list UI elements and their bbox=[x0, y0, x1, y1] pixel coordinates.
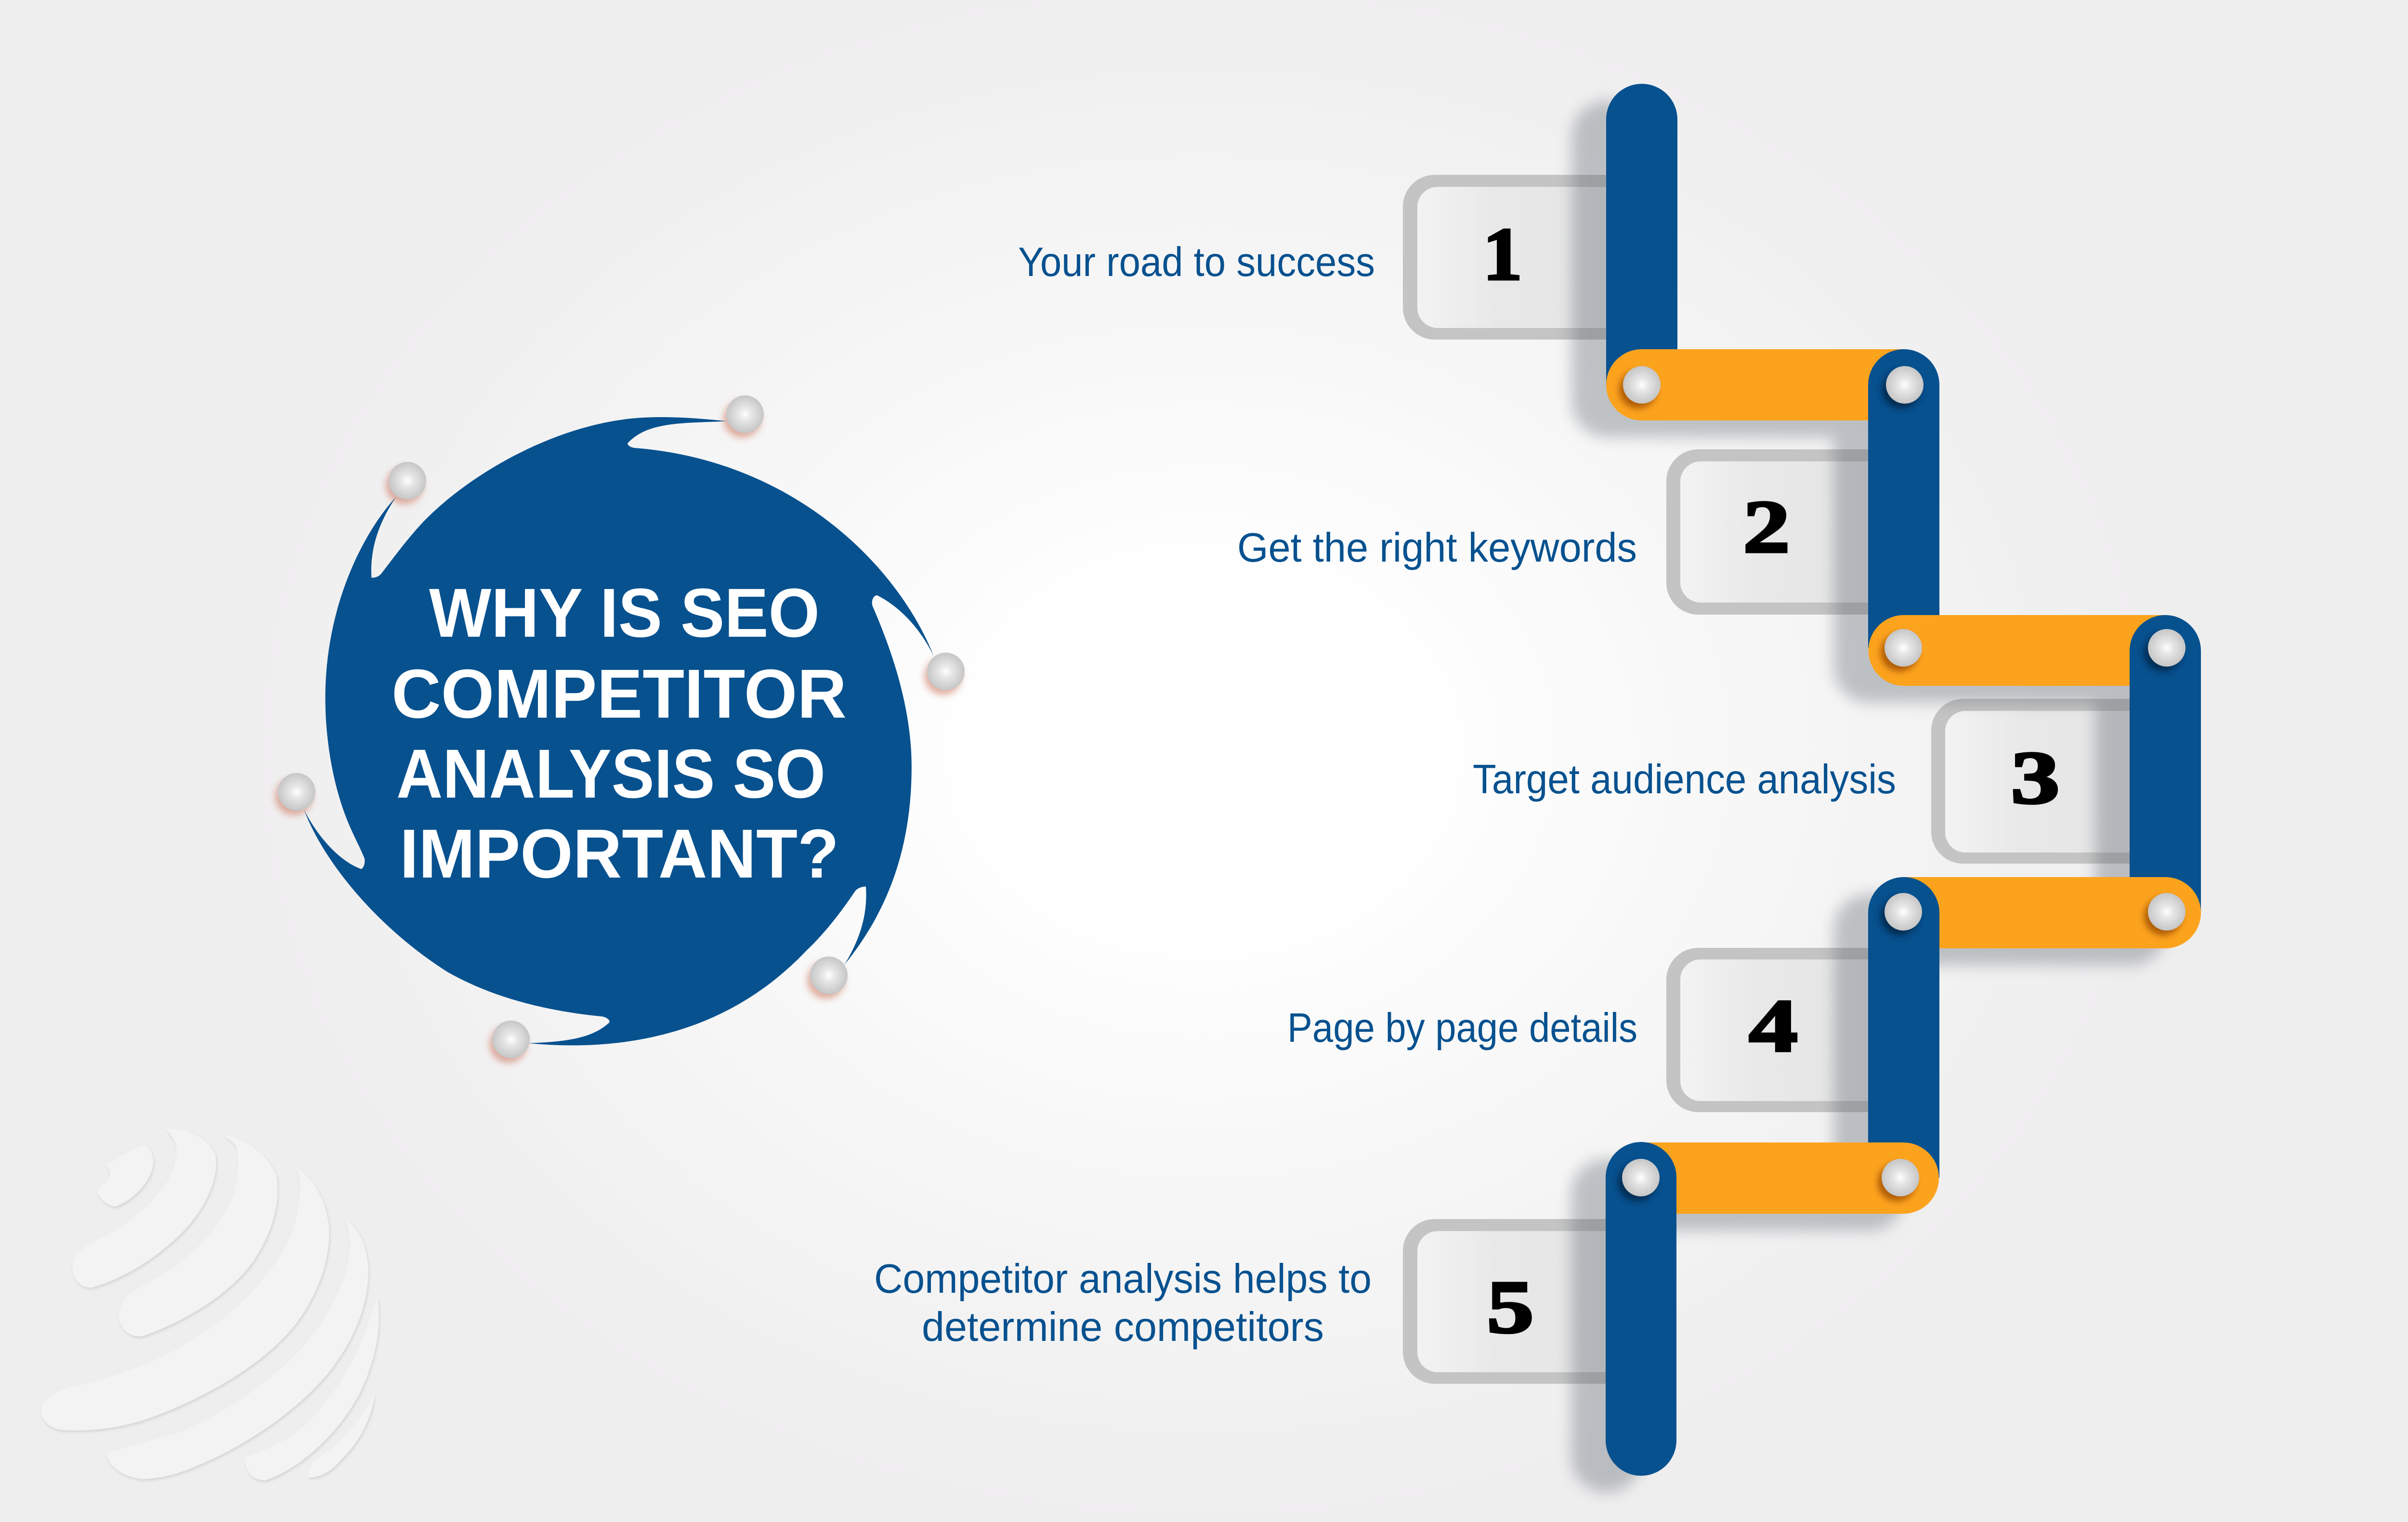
blue bar 4 bbox=[1868, 877, 1939, 1178]
step 4 label: Page by page details bbox=[1287, 1005, 1637, 1051]
pearl shadows on orange bbox=[1619, 371, 2182, 1201]
panel: step 2 number box bbox=[1666, 449, 1911, 615]
ribbon pearls bbox=[1622, 366, 2186, 1196]
panel: step 3 number box bbox=[1931, 699, 2176, 864]
panel: step 5 number box bbox=[1403, 1219, 1649, 1384]
title bbox=[392, 574, 847, 892]
orange bar 4 bbox=[1641, 1142, 1939, 1214]
step 1 label: Your road to success bbox=[1018, 239, 1375, 285]
panel: step 4 number box bbox=[1666, 948, 1911, 1112]
badge: blue swirl circle bbox=[304, 417, 934, 1045]
number 3: 3 bbox=[2011, 736, 2060, 819]
panel: step 1 number box bbox=[1403, 175, 1649, 340]
step 5 label bbox=[874, 1256, 1372, 1350]
title: ANALYSIS SO bbox=[396, 735, 825, 813]
step 5 label: determine competitors bbox=[922, 1304, 1324, 1350]
title: COMPETITOR bbox=[392, 655, 847, 733]
blue bar 5 bbox=[1606, 1142, 1676, 1476]
blue bar 3 bbox=[2130, 615, 2201, 912]
number 1: 1 bbox=[1483, 212, 1522, 296]
title: WHY IS SEO bbox=[429, 574, 820, 652]
ribbon: blue and orange zigzag bbox=[1606, 84, 2201, 1476]
ribbon shadow bbox=[1571, 101, 2166, 1493]
orange bar 1 bbox=[1606, 349, 1905, 420]
headline badge bbox=[275, 395, 965, 1063]
blue bar 2 bbox=[1868, 349, 1939, 648]
pearl shadows on blue bbox=[1618, 371, 2182, 1201]
orange bar 3 bbox=[1904, 877, 2201, 948]
badge pearls bbox=[275, 395, 965, 1063]
number 5: 5 bbox=[1487, 1266, 1534, 1349]
blue bar 1 bbox=[1606, 84, 1677, 385]
step 2 label: Get the right keywords bbox=[1237, 525, 1637, 571]
icon: faded globe bbox=[41, 1128, 379, 1481]
title: IMPORTANT? bbox=[400, 815, 839, 892]
step 5 label: Competitor analysis helps to bbox=[874, 1256, 1372, 1302]
step 3 label: Target audience analysis bbox=[1473, 757, 1896, 802]
number 2: 2 bbox=[1743, 485, 1790, 568]
orange bar 2 bbox=[1868, 615, 2165, 686]
number 4: 4 bbox=[1749, 984, 1798, 1067]
